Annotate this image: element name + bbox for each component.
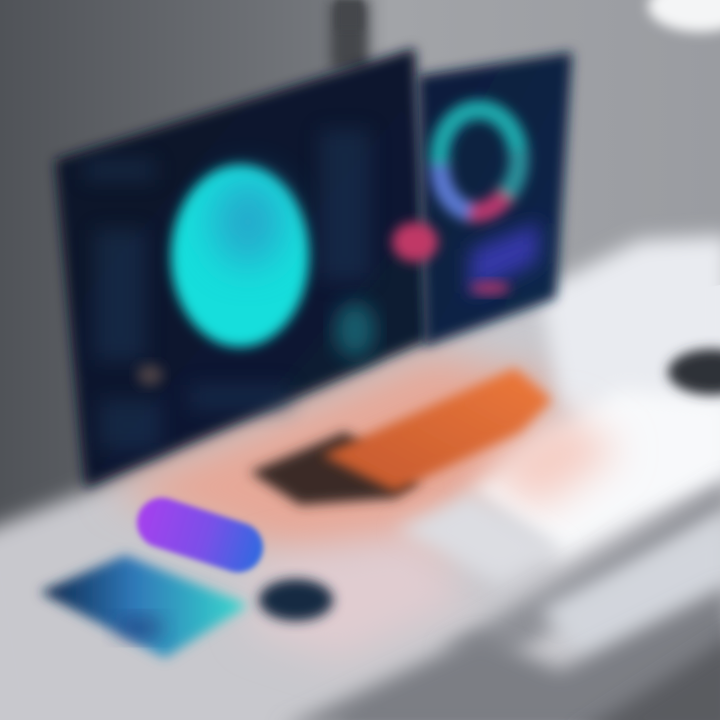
main monitor screen: [55, 48, 428, 488]
dark vertical band behind monitor: [330, 0, 368, 70]
blue centre of disc: [212, 178, 284, 266]
white paper base on right edge: [640, 285, 720, 470]
diagonal grey bar lower right: [440, 480, 720, 665]
white paper stack right: [540, 235, 720, 500]
purple pill device: [130, 491, 270, 579]
pink chart block: [392, 222, 438, 262]
teal lower block: [335, 302, 375, 358]
cyan donut disc: [171, 165, 309, 347]
dark tablet under orange cover: [250, 432, 420, 505]
darkest corner bottom right: [570, 630, 720, 720]
peach desk strip: [110, 355, 560, 560]
pale panel lower right: [540, 510, 720, 665]
dark round object right: [668, 349, 720, 395]
phone with teal screen: [40, 555, 248, 658]
bright paper lower right: [470, 390, 720, 560]
red accent on bars: [470, 281, 510, 295]
peach tint on paper: [480, 410, 620, 510]
purple bars chart: [470, 222, 540, 295]
wall top edge fill for band: [336, 0, 362, 30]
grey card under paper: [395, 490, 565, 585]
faint dashboard text blocks: [85, 130, 370, 450]
ring chart: [440, 110, 519, 212]
dark grey foreground soft edge: [280, 585, 720, 720]
desk surface base: [0, 330, 720, 720]
orange cover: [322, 368, 552, 492]
lamp highlight top right: [648, 0, 720, 32]
foreground base bottom right: [340, 620, 720, 720]
dark patch on phone: [116, 616, 164, 640]
desk surface soft edge: [0, 290, 720, 720]
pale pink desk area: [250, 530, 470, 660]
second monitor screen: [418, 52, 572, 346]
dark round puck: [259, 579, 333, 621]
muted dot on screen: [137, 364, 163, 386]
